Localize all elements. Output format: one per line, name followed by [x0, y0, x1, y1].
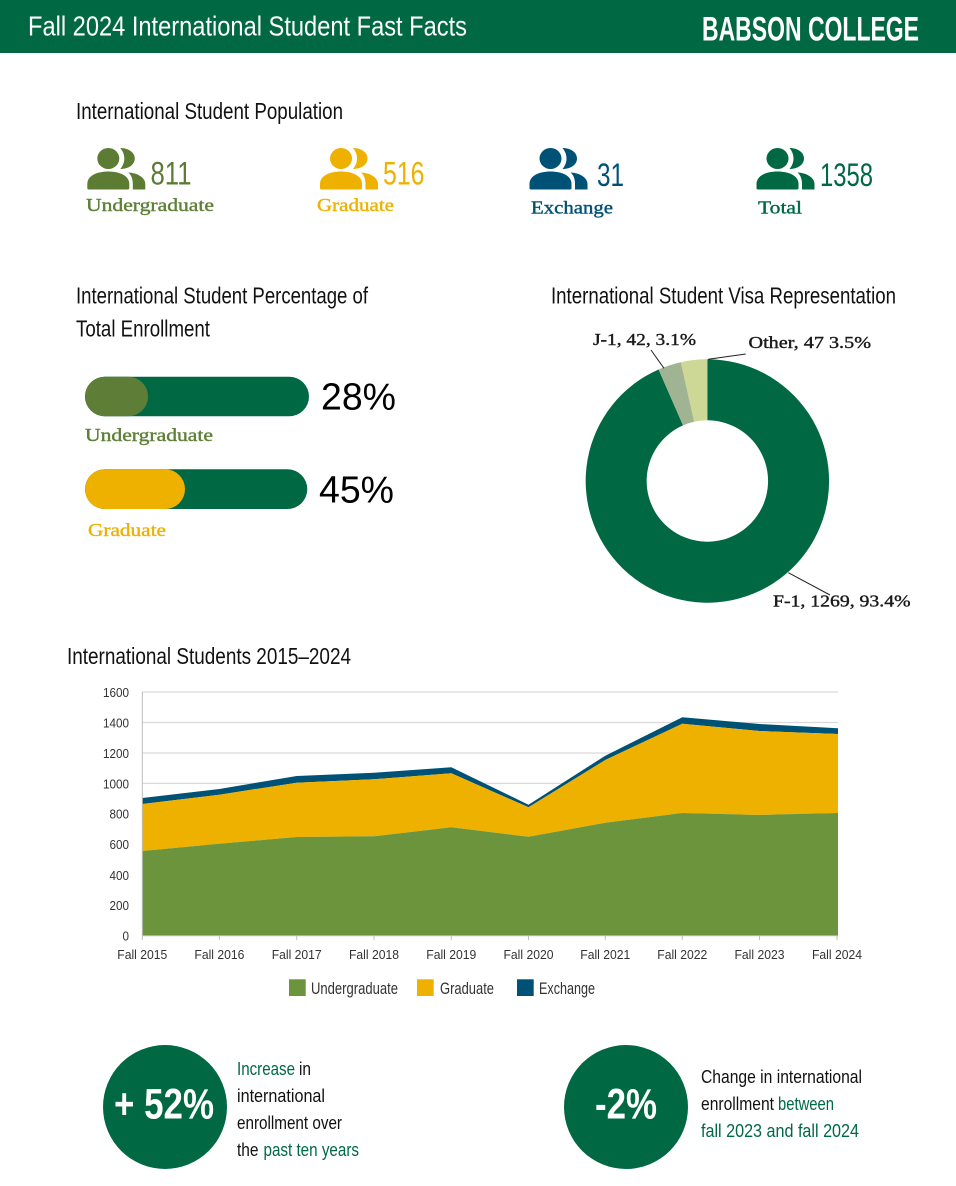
- x axis labels: Fall 2022: [657, 947, 707, 962]
- chart legend: Undergraduate: [311, 980, 398, 998]
- area: undergraduate: [142, 813, 838, 936]
- stat: exchange: [530, 148, 624, 218]
- icon: people: [87, 148, 145, 190]
- chart legend: Graduate: [440, 980, 494, 998]
- heading: population: International Student Population: [76, 98, 343, 124]
- number: 516: [383, 156, 424, 192]
- callout text: the: [237, 1140, 258, 1160]
- value: 28%: [321, 376, 396, 418]
- stat: undergraduate: [86, 148, 214, 215]
- y axis labels: 600: [110, 837, 129, 852]
- label: Graduate: [317, 195, 394, 215]
- label: Undergraduate: [85, 425, 213, 445]
- callout: +52%: + 52%: [114, 1080, 214, 1128]
- callout text: international: [237, 1086, 325, 1106]
- x axis labels: Fall 2018: [349, 947, 399, 962]
- x axis labels: Fall 2023: [734, 947, 784, 962]
- label: Graduate: [88, 520, 166, 540]
- title: Fall 2024 International Student Fast Facts: [28, 10, 467, 42]
- stat: graduate: [317, 148, 424, 215]
- chart legend: Exchange: [539, 980, 595, 998]
- callout text: enrollment over: [237, 1113, 342, 1133]
- leader lines: [651, 350, 830, 595]
- area chart: international students 2015-2024: [103, 685, 862, 962]
- label: Total: [758, 198, 802, 218]
- x axis labels: [117, 947, 862, 962]
- progress bar: undergraduate 28%: [85, 376, 396, 445]
- segment: Other: [681, 359, 707, 422]
- callout: -2%: [564, 1045, 862, 1169]
- heading: percentage of enrollment: [76, 282, 368, 342]
- callout: +52%: [103, 1045, 359, 1169]
- y axis labels: 200: [110, 898, 129, 913]
- x axis labels: Fall 2019: [426, 947, 476, 962]
- value: 45%: [319, 470, 394, 512]
- area: graduate: [142, 724, 838, 851]
- number: 1358: [820, 157, 873, 193]
- stat: total: [756, 148, 873, 218]
- label: Other: Other, 47 3.5%: [748, 333, 871, 352]
- area: exchange: [142, 717, 838, 807]
- callout text: in: [299, 1059, 311, 1079]
- x axis labels: Fall 2017: [272, 947, 322, 962]
- number: 31: [597, 157, 624, 193]
- icon: people: [320, 148, 378, 190]
- callout: -2%: -2%: [595, 1080, 657, 1128]
- x axis labels: Fall 2020: [504, 947, 554, 962]
- heading: percentage of enrollment: International Student Percentage of: [76, 282, 368, 308]
- y axis labels: [103, 685, 129, 944]
- callout text: between: [778, 1094, 834, 1114]
- label: J-1: J-1, 42, 3.1%: [593, 330, 696, 349]
- label: Exchange: [531, 198, 613, 218]
- x axis labels: Fall 2024: [812, 947, 862, 962]
- y axis labels: 1400: [103, 716, 129, 730]
- x axis labels: Fall 2015: [117, 947, 167, 962]
- y axis labels: 1200: [103, 746, 129, 761]
- callout text: enrollment: [701, 1094, 774, 1114]
- heading: percentage of enrollment: Total Enrollment: [76, 316, 210, 342]
- y axis labels: 800: [110, 806, 129, 822]
- donut chart: visa representation: [586, 330, 910, 610]
- chart legend: [289, 979, 595, 998]
- callout text: [237, 1059, 359, 1160]
- x axis labels: Fall 2021: [580, 947, 630, 962]
- y axis labels: 1000: [103, 776, 129, 792]
- segment: J-1: [659, 362, 694, 425]
- number: 811: [150, 156, 192, 192]
- heading: trend chart: International Students 2015–2024: [67, 643, 351, 669]
- label: Undergraduate: [86, 195, 214, 215]
- label: F-1: F-1, 1269, 93.4%: [773, 592, 910, 610]
- y axis labels: 1600: [103, 685, 129, 700]
- header banner: [0, 0, 956, 53]
- y axis labels: 0: [122, 928, 129, 944]
- callout text: [701, 1067, 862, 1141]
- x axis labels: Fall 2016: [194, 947, 244, 962]
- y axis labels: 400: [110, 868, 129, 883]
- callout text: Increase: [237, 1059, 295, 1079]
- progress bar: graduate 45%: [85, 469, 394, 540]
- callout text: Change in international: [701, 1067, 862, 1087]
- icon: people: [530, 148, 588, 190]
- callout text: fall 2023 and fall 2024: [701, 1121, 859, 1141]
- icon: people: [756, 148, 814, 190]
- callout text: past ten years: [264, 1140, 359, 1160]
- segment: F-1: [586, 359, 829, 603]
